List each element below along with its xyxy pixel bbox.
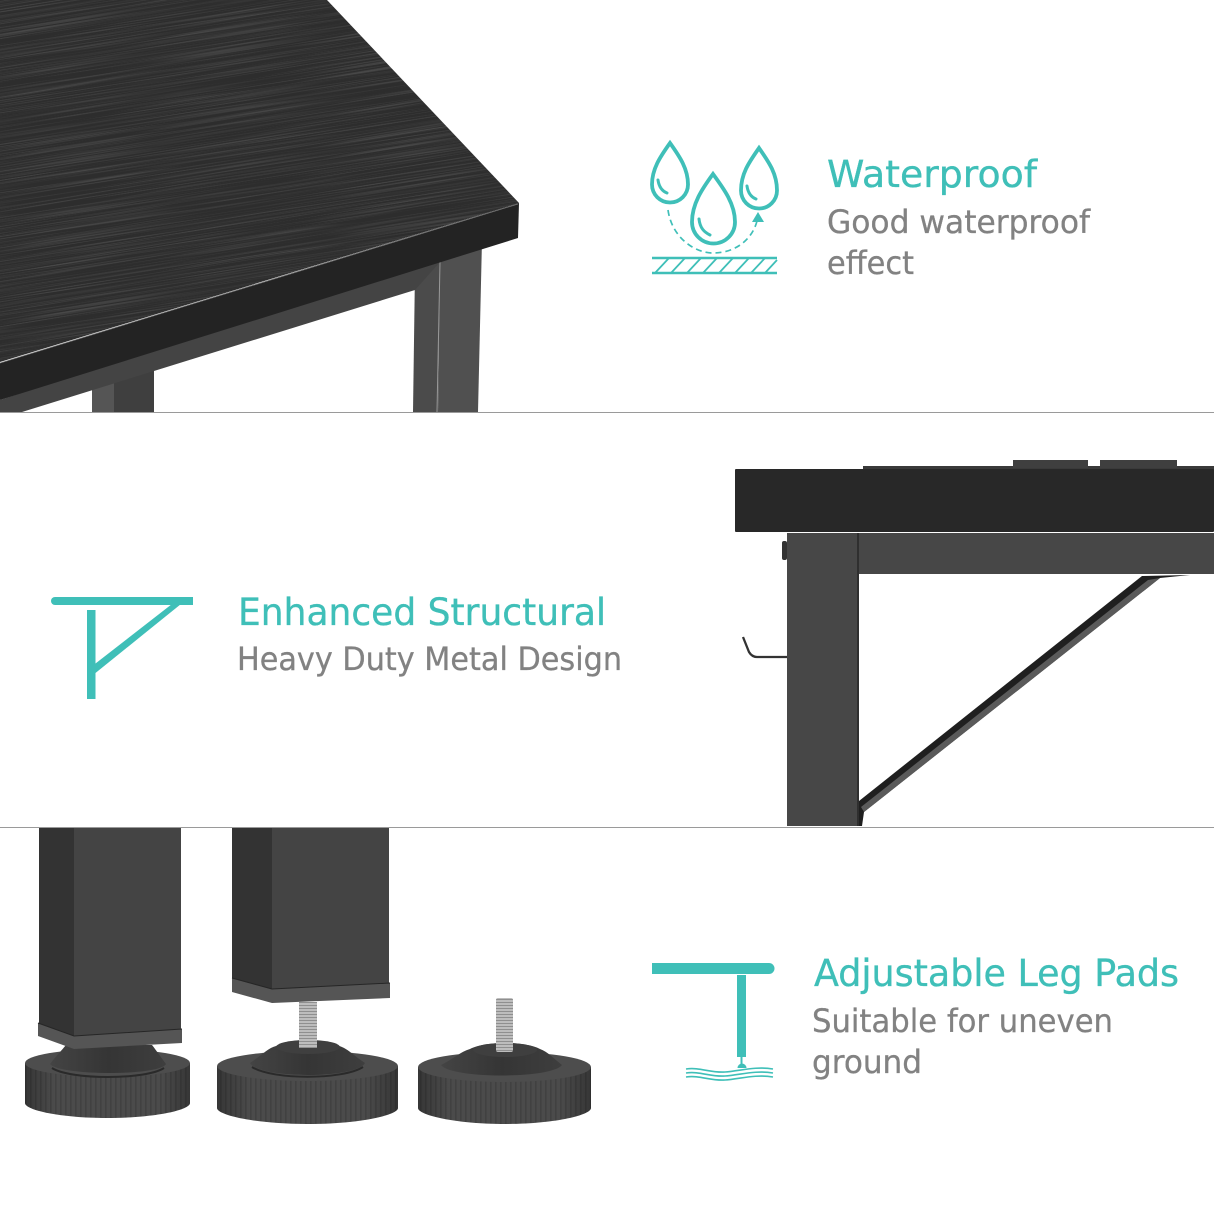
divider <box>0 412 1214 413</box>
text: waterproof description: Good waterproof <box>827 203 1091 241</box>
text: leg pads description <box>812 1002 1113 1081</box>
photo: desk side view <box>735 460 1214 826</box>
text: waterproof description: effect <box>827 244 914 282</box>
heading: Enhanced Structural: Enhanced Structural <box>238 591 606 634</box>
divider <box>0 827 1214 828</box>
text: leg pads description: Suitable for uneven <box>812 1002 1113 1040</box>
text: leg pads description: ground <box>812 1043 922 1081</box>
icon: water drops <box>652 143 777 273</box>
icon: adjustable leg <box>652 963 775 1080</box>
text: waterproof description <box>827 203 1091 282</box>
icon: bracket structure <box>51 597 193 699</box>
text: structural description: Heavy Duty Metal Design <box>237 640 622 678</box>
photo: adjustable leg with pad, raised <box>217 828 398 1124</box>
heading: Waterproof: Waterproof <box>827 153 1038 196</box>
photo: leveling pad with bolt <box>418 998 591 1124</box>
photo: desk corner top view <box>0 0 519 412</box>
heading: Adjustable Leg Pads: Adjustable Leg Pads <box>814 952 1179 995</box>
photo: adjustable leg with pad, lowered <box>25 828 190 1118</box>
